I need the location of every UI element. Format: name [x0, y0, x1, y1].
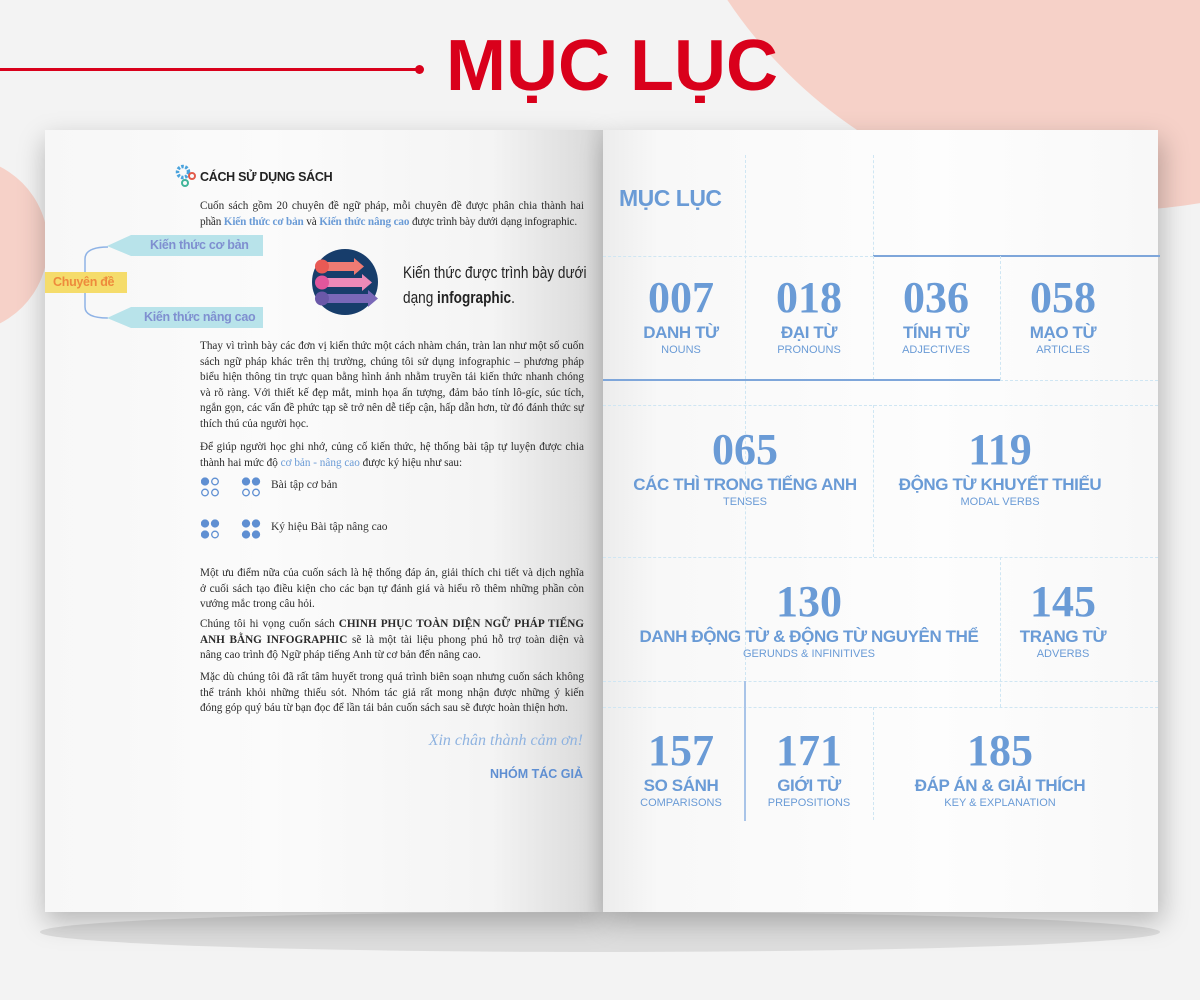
toc item: 065: [633, 425, 857, 508]
toc item: 036: [902, 273, 970, 356]
text: authors: NHÓM TÁC GIẢ: [490, 767, 583, 781]
toc item: 058: ARTICLES: [1036, 344, 1090, 356]
toc item: 058: MẠO TỪ: [1030, 323, 1096, 342]
text block: paragraph 2: biểu hiện thông tin trực quan bằng hình ảnh nhằm truyền tải kiến thức nhanh chóng: [200, 371, 584, 383]
text block: paragraph 6: Mặc dù chúng tôi đã rất tâm huyết trong quá trình biên soạn nhưng cuốn sách không: [200, 671, 584, 683]
toc item: 007: [643, 273, 720, 356]
toc item: 157: COMPARISONS: [640, 797, 722, 809]
text block: intro: [200, 200, 584, 228]
toc item: 058: 058: [1030, 273, 1096, 322]
text block: paragraph 4: vướng mắc trong câu hỏi.: [200, 598, 315, 610]
toc item: 065: TENSES: [723, 496, 767, 508]
toc item: 018: ĐẠI TỪ: [781, 323, 837, 342]
text block: paragraph 2: ngắn gọn, các vấn đề phức tạp sẽ trở nên dễ tiếp cận, hấp dẫn hơn, từ đó đánh thức sự: [200, 402, 584, 414]
text block: paragraph 4: Một ưu điểm nữa của cuốn sách là hệ thống đáp án, giải thích chi tiết và dịch nghĩa: [200, 567, 584, 579]
toc item: 185: ĐÁP ÁN & GIẢI THÍCH: [915, 776, 1085, 795]
toc item: 130: [640, 577, 978, 660]
legend: advanced exercises: [201, 519, 388, 539]
text block: paragraph 6: thể tránh khỏi những thiếu sót. Nhóm tác giả rất mong nhận được những ý kiến: [200, 687, 584, 699]
toc item: 185: 185: [967, 726, 1033, 775]
toc item: 171: [768, 726, 850, 809]
text block: paragraph 2: và rõ ràng. Với thiết kế đẹp mắt, minh họa ấn tượng, đảm bảo tính lô-gíc, súc tích,: [200, 387, 584, 399]
toc item: 007: DANH TỪ: [643, 323, 719, 342]
tag: kiến thức nâng cao: Kiến thức nâng cao: [144, 310, 255, 324]
text: thanks: Xin chân thành cảm ơn!: [429, 732, 583, 749]
toc item: 157: [640, 726, 722, 809]
toc item: 157: 157: [648, 726, 714, 775]
text block: paragraph 4: [200, 567, 584, 610]
text block: intro: Cuốn sách gồm 20 chuyên đề ngữ pháp, mỗi chuyên đề được phân chia thành hai: [200, 200, 584, 212]
panel: right page: [603, 130, 1158, 912]
toc item: 171: 171: [776, 726, 842, 775]
toc item: 145: 145: [1030, 577, 1096, 626]
text block: paragraph 5: [200, 616, 584, 661]
text block: paragraph 3: Để giúp người học ghi nhớ, củng cố kiến thức, hệ thống bài tập tự luyện được chia: [200, 441, 584, 453]
toc item: 119: 119: [968, 425, 1032, 474]
text: kiến thức được trình bày: Kiến thức được trình bày dưới: [403, 263, 586, 282]
toc item: 130: 130: [776, 577, 842, 626]
toc item: 018: PRONOUNS: [777, 344, 841, 356]
toc item: 065: CÁC THÌ TRONG TIẾNG ANH: [633, 475, 857, 494]
panel: left page: [45, 130, 603, 912]
icon: gears: [176, 164, 196, 187]
toc item: 036: ADJECTIVES: [902, 344, 970, 356]
title: MỤC LỤC: [446, 26, 778, 106]
text block: paragraph 6: [200, 671, 584, 714]
legend: basic exercises: Bài tập cơ bản: [271, 479, 337, 491]
toc item: 065: 065: [712, 425, 778, 474]
heading: cách sử dụng sách: CÁCH SỬ DỤNG SÁCH: [200, 170, 332, 184]
text: kiến thức được trình bày: [403, 263, 586, 307]
toc item: 007: NOUNS: [661, 344, 701, 356]
diagram: chuyên đề: [45, 235, 263, 328]
text block: paragraph 3: thành hai mức độ cơ bản - nâng cao được ký hiệu như sau:: [200, 457, 462, 469]
icon: infographic circle: [312, 249, 378, 315]
text block: paragraph 6: đóng góp quý báu từ bạn đọc để lần tái bản cuốn sách sau sẽ được hoàn thiện hơn.: [200, 702, 568, 714]
toc item: 018: [776, 273, 842, 356]
toc item: 130: DANH ĐỘNG TỪ & ĐỘNG TỪ NGUYÊN THỂ: [640, 627, 978, 646]
toc item: 119: ĐỘNG TỪ KHUYẾT THIẾU: [899, 475, 1101, 494]
toc item: 058: [1030, 273, 1097, 356]
toc item: 130: GERUNDS & INFINITIVES: [743, 648, 875, 660]
toc item: 018: 018: [776, 273, 842, 322]
text block: paragraph 2: Thay vì trình bày các đơn vị kiến thức một cách nhàm chán, tràn lan như một số cuốn: [200, 340, 584, 352]
text block: paragraph 2: [200, 340, 584, 430]
header line with dot: [0, 65, 424, 74]
text block: paragraph 2: thích thú của người học.: [200, 418, 309, 430]
text block: paragraph 5: ANH BẰNG INFOGRAPHIC sẽ là một tài liệu phong phú hỗ trợ toàn diện và: [200, 634, 584, 646]
legend: advanced exercises: Ký hiệu Bài tập nâng cao: [271, 521, 388, 533]
text: kiến thức được trình bày: dạng infographic.: [403, 288, 515, 307]
text block: paragraph 2: sách ngữ pháp khác trên thị trường, chúng tôi sử dụng infographic – phương pháp: [200, 356, 584, 368]
text block: paragraph 3: [200, 441, 584, 469]
toc item: 171: PREPOSITIONS: [768, 797, 850, 809]
heading: mục lục (right page): MỤC LỤC: [619, 185, 722, 211]
toc item: 157: SO SÁNH: [644, 776, 718, 795]
box: chuyên đề: Chuyên đề: [53, 275, 114, 289]
toc item: 007: 007: [648, 273, 714, 322]
tag: kiến thức cơ bản: Kiến thức cơ bản: [150, 238, 249, 252]
legend: basic exercises: [201, 477, 338, 496]
toc item: 036: TÍNH TỪ: [903, 323, 969, 342]
toc item: 145: [1020, 577, 1107, 660]
text block: paragraph 4: ở cuối sách tạo điều kiện cho các bạn tự đánh giá và hiểu rõ thêm những phần còn: [200, 583, 584, 595]
toc item: 145: ADVERBS: [1037, 648, 1089, 660]
toc item: 119: [898, 425, 1101, 508]
toc item: 036: 036: [903, 273, 969, 322]
text block: intro: phần Kiến thức cơ bản và Kiến thức nâng cao được trình bày dưới dạng infographic.: [200, 216, 577, 228]
text block: paragraph 5: Chúng tôi hi vọng cuốn sách CHINH PHỤC TOÀN DIỆN NGỮ PHÁP TIẾNG: [200, 618, 584, 630]
toc item: 119: MODAL VERBS: [960, 496, 1040, 508]
toc item: 185: KEY & EXPLANATION: [944, 797, 1056, 809]
text block: paragraph 5: nâng cao trình độ Ngữ pháp tiếng Anh từ cơ bản đến nâng cao.: [200, 649, 481, 661]
toc item: 145: TRẠNG TỪ: [1020, 627, 1106, 646]
toc item: 185: [914, 726, 1085, 809]
toc item: 171: GIỚI TỪ: [777, 776, 841, 795]
